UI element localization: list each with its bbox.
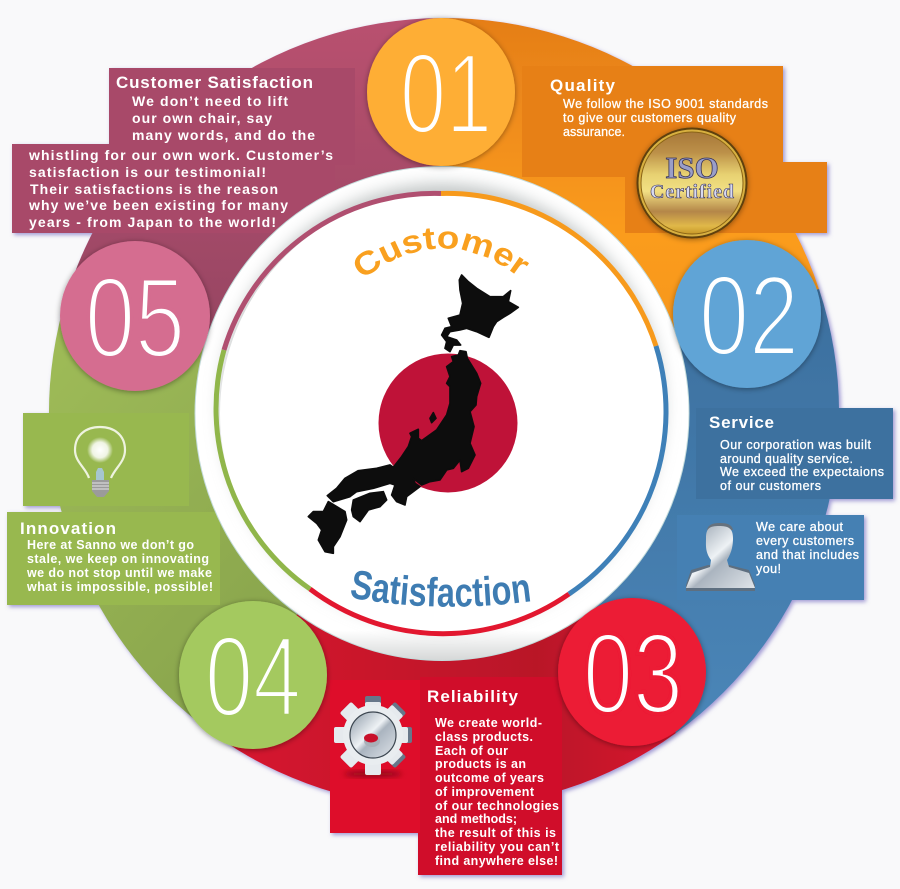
arc: orange [441, 193, 656, 346]
panel shape: orange [522, 66, 827, 233]
Japan map silhouette [308, 275, 518, 553]
icon: silver gear [334, 696, 412, 776]
body [720, 438, 884, 493]
body [26, 538, 213, 594]
body: years - from Japan to the world! [29, 214, 276, 230]
number circle 03: 03 [583, 611, 683, 738]
wedge: quality [441, 18, 819, 413]
number circle 01 [367, 18, 515, 166]
icon: ISO certified gold seal [638, 128, 746, 238]
text block: quality [550, 76, 768, 139]
body: Here at Sanno we don’t go [27, 538, 194, 552]
body [28, 93, 333, 230]
panel shape: pink [12, 68, 355, 233]
number circle 04: 04 [205, 614, 301, 741]
panel shape: green lower [7, 512, 220, 605]
number circle 03 [558, 598, 706, 746]
heading: Reliability [427, 687, 519, 706]
body: why we’ve been existing for many [28, 197, 288, 213]
body: class products. [435, 730, 533, 744]
text block: customer satisfaction [28, 73, 333, 230]
icon: ISO certified gold seal: ISO [665, 150, 719, 185]
body: our own chair, say [132, 110, 272, 126]
text block: we care: We care about [756, 520, 844, 534]
body: Their satisfactions is the reason [30, 181, 278, 197]
arc: blue [569, 346, 666, 594]
body: what is impossible, possible! [26, 580, 213, 594]
curved title: Customer: Customer [354, 228, 529, 275]
text block: innovation [20, 519, 213, 594]
text block: we care: every customers [756, 534, 854, 548]
ring base [195, 166, 689, 660]
wedge: innovation [49, 295, 444, 732]
text block: we care [756, 520, 859, 576]
text block: we care: you! [756, 562, 781, 576]
body: We create world- [435, 716, 542, 730]
icon: ISO certified gold seal: Certified [650, 181, 734, 203]
body: the result of this is [435, 826, 556, 840]
panel shape: red left [330, 680, 421, 833]
wedge: service [444, 289, 839, 733]
central white ring [195, 166, 689, 660]
text block: reliability [427, 687, 560, 868]
heading: Customer Satisfaction [116, 73, 313, 92]
body: whistling for our own work. Customer’s [28, 147, 333, 163]
body: find anywhere else! [435, 854, 558, 868]
number circle 02: 02 [699, 253, 799, 380]
wedge: reliability [211, 413, 676, 808]
body: We follow the ISO 9001 standards [563, 97, 768, 111]
panel shape: red right [418, 677, 562, 875]
body: Each of our [435, 744, 508, 758]
body [563, 97, 768, 139]
curved title: Satisfaction: Satisfaction [351, 570, 530, 607]
body: to give our customers quality [563, 111, 737, 125]
panel shape: blue upper [696, 408, 893, 499]
body: reliability you can’t [435, 840, 560, 854]
Japan sun disc [378, 354, 518, 492]
wedge and panel: customer satisfaction [67, 18, 444, 413]
body: assurance. [563, 125, 625, 139]
inner disc [220, 192, 664, 636]
heading: Innovation [20, 519, 116, 538]
icon: silver person bust [686, 523, 755, 591]
number circle 02 [673, 240, 821, 388]
body: We exceed the expectaions [720, 465, 884, 479]
body: We don’t need to lift [132, 93, 288, 109]
arc: green [216, 350, 310, 589]
number circle 04 [179, 601, 327, 749]
text block: we care: and that includes [756, 548, 859, 562]
body: many words, and do the [132, 127, 315, 143]
body: of our technologies [435, 799, 559, 813]
icon: light bulb [75, 427, 125, 497]
body: around quality service. [720, 452, 853, 466]
heading: Quality [550, 76, 616, 95]
panel shape: green upper [23, 413, 189, 506]
body: we do not stop until we make [26, 566, 212, 580]
heading: Service [709, 413, 774, 432]
body: of our customers [720, 479, 821, 493]
text block: service [709, 413, 884, 493]
body: satisfaction is our testimonial! [29, 164, 266, 180]
body: products is an [435, 757, 526, 771]
body: Our corporation was built [720, 438, 872, 452]
arc: pink [224, 193, 441, 350]
body [435, 716, 560, 868]
ring inner shading [221, 184, 663, 626]
body: and methods; [435, 812, 517, 826]
body: stale, we keep on innovating [27, 552, 209, 566]
arc: red [310, 589, 569, 634]
panel shape: blue lower [677, 515, 864, 600]
body: of improvement [435, 785, 535, 799]
number circle 01: 01 [400, 31, 492, 158]
number circle 05: 05 [85, 255, 185, 382]
body: outcome of years [435, 771, 544, 785]
number circle 05 [60, 241, 210, 391]
